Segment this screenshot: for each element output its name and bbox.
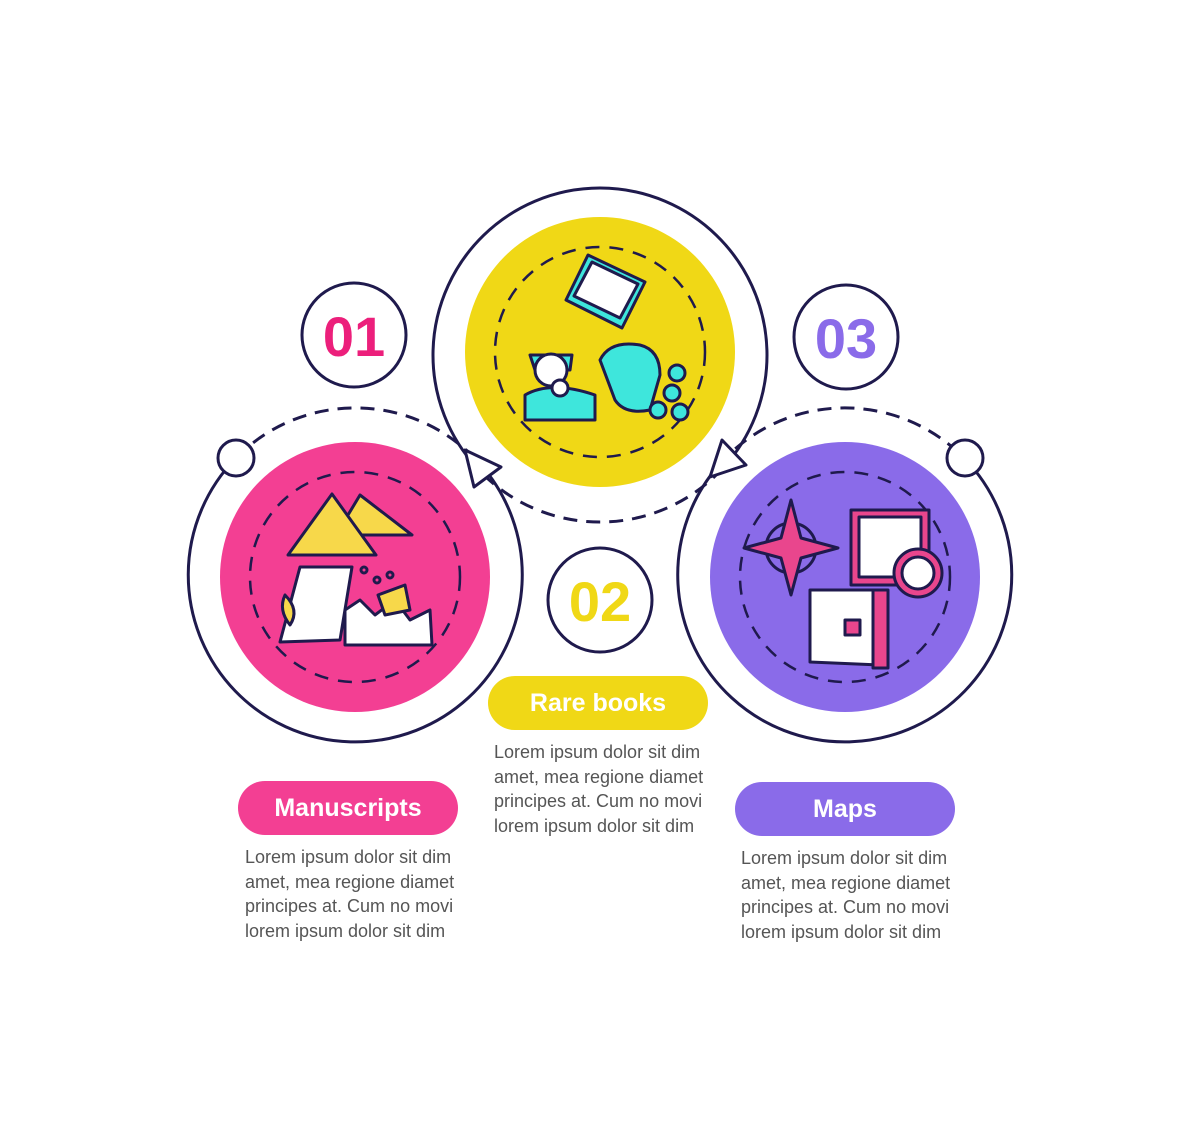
small open circles bbox=[218, 440, 983, 476]
number 01 bbox=[302, 283, 406, 387]
number 02: 02 bbox=[569, 570, 631, 633]
pill: Rare books: Rare books bbox=[530, 689, 666, 717]
pill: Manuscripts: Manuscripts bbox=[274, 794, 422, 822]
number 03 bbox=[794, 285, 898, 389]
panel: rare books circle bbox=[465, 217, 735, 487]
text: rare books: Lorem ipsum dolor sit dim amet, mea regione diamet principes at. Cum no movi lorem ipsum dolor sit dim bbox=[494, 742, 703, 836]
pill: Rare books bbox=[488, 676, 708, 730]
number 03: 03 bbox=[815, 307, 877, 370]
text: manuscripts: Lorem ipsum dolor sit dim amet, mea regione diamet principes at. Cum no movi lorem ipsum dolor sit dim bbox=[245, 847, 454, 940]
panel: maps circle bbox=[710, 442, 980, 712]
number 02 bbox=[548, 548, 652, 652]
panel: manuscripts circle bbox=[220, 442, 490, 712]
number 01: 01 bbox=[323, 305, 385, 368]
pill: Manuscripts bbox=[238, 781, 458, 835]
icon: pyramids, scroll, ruins bbox=[280, 494, 432, 645]
pill: Maps: Maps bbox=[813, 795, 877, 823]
pill: Maps bbox=[735, 782, 955, 836]
icon: book, explorer, scroll bbox=[525, 255, 688, 420]
arrow: right bbox=[710, 440, 746, 477]
icon: compass rose, map, compass bbox=[744, 500, 942, 668]
text: maps: Lorem ipsum dolor sit dim amet, mea regione diamet principes at. Cum no movi lorem ipsum dolor sit dim bbox=[741, 848, 950, 942]
arrow: left bbox=[465, 450, 501, 487]
